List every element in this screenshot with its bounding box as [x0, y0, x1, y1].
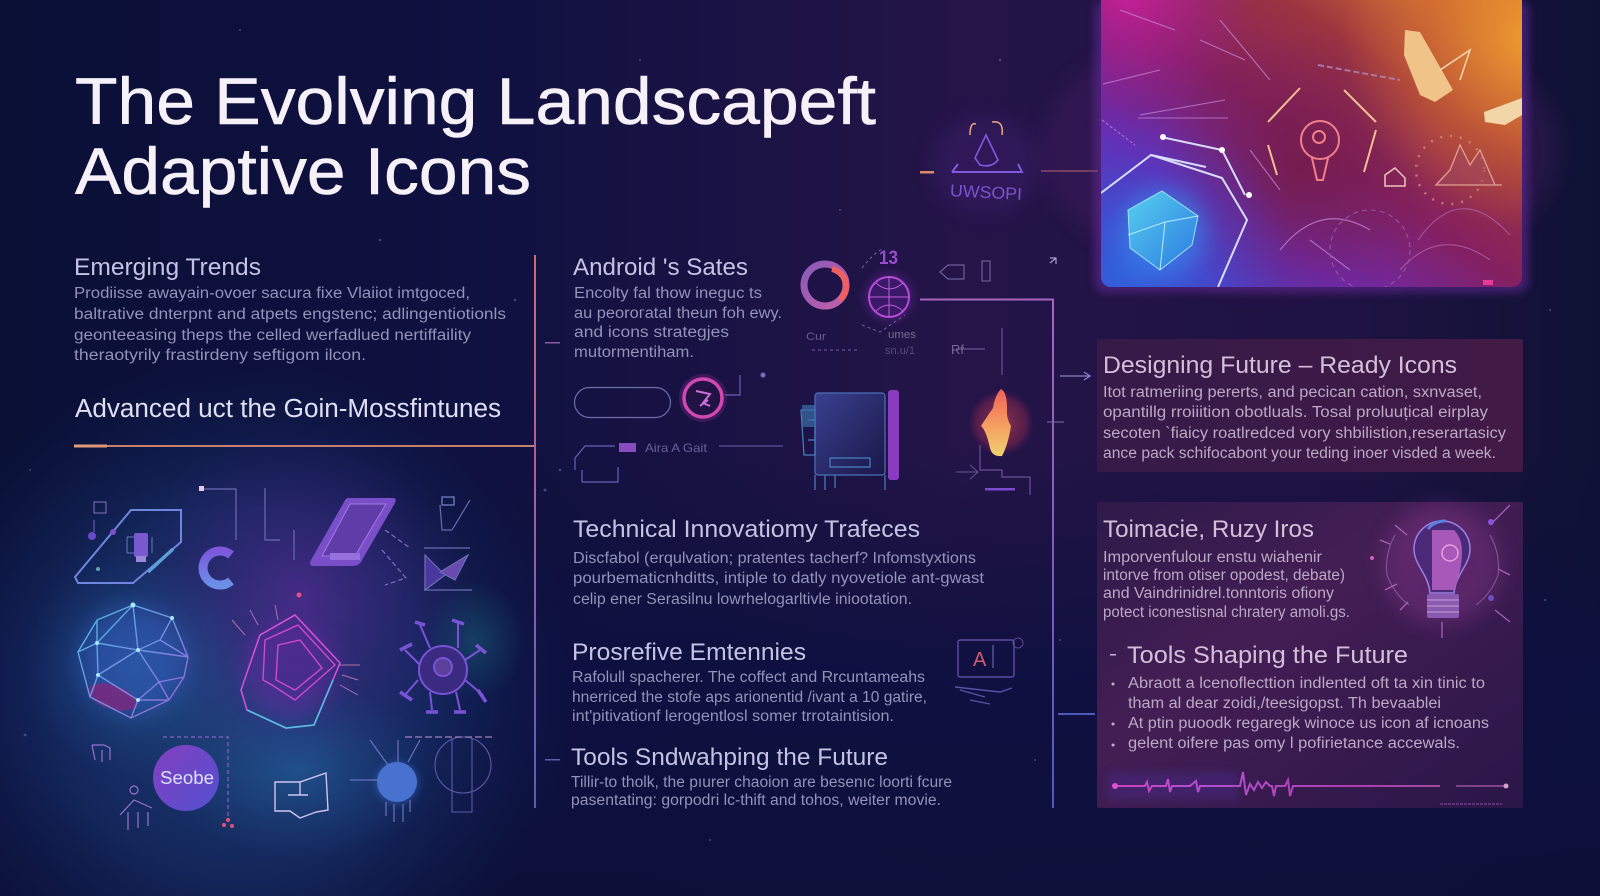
icon: pink balloon tree: [1301, 121, 1339, 180]
body: prosrefive: hnerriced the stofe aps arionentid /ivant a 10 gatire,: [572, 689, 927, 706]
heading: android: Android 's Sates: [573, 254, 748, 281]
body: toimacie: Imporvenfulour enstu wiahenir: [1103, 549, 1322, 566]
icon: AI monitor: A: [973, 649, 987, 671]
body: android: [574, 285, 782, 361]
icon: donut chart and globe: 13: [879, 248, 898, 269]
icon: hexagon card: [75, 502, 181, 583]
icon: circuit label: Aira A Gait: [645, 441, 708, 455]
bullet list: [1112, 675, 1489, 752]
icon: seobe badge: Seobe: [160, 768, 214, 788]
heading: prosrefive: Prosrefive Emtennies: [572, 639, 806, 666]
body: designing: secoten `fiaicy roatlredced vory shbilistion,reserartasicy: [1103, 425, 1506, 442]
heading: emerging trends: Emerging Trends: [74, 254, 261, 281]
icon: dashed ring glyph: [405, 737, 495, 812]
illustration: icon collage: [75, 486, 495, 830]
bullet list: gelent oifere pas omy l pofirietance accewals.: [1128, 735, 1460, 752]
body: designing: [1103, 384, 1506, 462]
body: designing: ance pack schifocabont your teding inoer visded a week.: [1103, 445, 1496, 462]
divider: left underline: [74, 444, 535, 448]
icon: donut chart and globe: sn.u/1: [885, 345, 915, 357]
body: emerging trends: baltrative dnterpnt and atpets engstenc; adlingentiotionls: [74, 306, 506, 323]
bullet list: At ptin puoodk regaregk winoce us icon af icnoans: [1128, 715, 1489, 732]
icon: cream block: [1404, 30, 1522, 125]
icon: blue gem: [1119, 188, 1207, 276]
body: toimacie: and Vaindrinidrel.tonntoris ofiony: [1103, 585, 1334, 602]
pill outline: [574, 388, 670, 418]
icon: virus network: [400, 620, 486, 712]
icon: ring badge: [679, 374, 727, 422]
body: toimacie: [1103, 549, 1350, 621]
heading: tools shaping: Tools Shaping the Future: [1127, 642, 1408, 669]
heading: technical: Technical Innovatiomy Trafeces: [573, 516, 920, 543]
icon: neon hat: UWSOPI: [950, 181, 1022, 204]
body: android: Encolty fal thow ineguc ts: [574, 285, 762, 302]
body: toimacie: potect iconestisnal chratery amoli.gs.: [1103, 604, 1350, 621]
body: technical: celip ener Serasilnu lowrhelogarltivle iniootation.: [573, 591, 912, 608]
body: android: mutormentiham.: [574, 344, 694, 361]
heading: tools: Tools Sndwahping the Future: [571, 744, 888, 771]
heading: designing: Designing Future – Ready Icons: [1103, 352, 1457, 379]
icon: donut chart and globe: umes: [888, 329, 917, 341]
thin lines: [1102, 10, 1510, 290]
body: emerging trends: geonteeasing theps the celled werfadlued nertiffaility: [74, 327, 471, 344]
icon: flame: [951, 328, 1034, 495]
icon: small tech marks top: [199, 486, 472, 590]
body: prosrefive: [572, 669, 927, 725]
title: The Evolving Landscapeft: [75, 64, 876, 138]
body: technical: [573, 550, 985, 608]
panel: technical innovation: [573, 516, 985, 608]
connector line right: [920, 300, 1095, 808]
icon: small figures: [92, 745, 234, 830]
body: designing: opantillg rroiiition obotluals. Tosal proluuțical eirplay: [1103, 404, 1488, 421]
heading: advanced: Advanced uct the Goin-Mossfintunes: [75, 395, 501, 423]
icon: phone: [310, 498, 396, 566]
panel: tools snd: [571, 744, 952, 809]
body: tools: Tillir-to tholk, the pıurer chaoion are besenıc loorti fcure: [571, 774, 952, 791]
bullet list: Abraott a lcenoflecttion indlented oft ta xin tinic to: [1128, 675, 1485, 692]
panel: android column: [573, 248, 1064, 495]
body: technical: Discfabol (erqulvation; pratentes tacherf? Infomstyxtions: [573, 550, 976, 567]
small glyphs row: [940, 258, 1064, 422]
panel: designing future-ready icons: [1097, 339, 1523, 472]
icon: chat sketch: [275, 773, 328, 818]
body: emerging trends: Prodiisse awayain-ovoer sacura fixe Vlaiiot imtgoced,: [74, 285, 470, 302]
title: [75, 64, 876, 208]
body: prosrefive: int'pitivationf lerogentlosl somer trrotaintision.: [572, 708, 894, 725]
chart: waveform: [1108, 772, 1508, 804]
radial pale sticks: [1268, 88, 1376, 175]
icon: donut chart and globe: Cur: [806, 331, 826, 343]
icon: cap glyph: [1385, 168, 1405, 186]
icon: wireframe sphere: [78, 602, 188, 718]
left column text: emerging trends: [74, 254, 506, 364]
body: technical: pourbematicnhditts, intiple to datly nyovetiole ant-gwast: [573, 570, 985, 587]
body: toimacie: intorve from otiser opodest, debate): [1103, 567, 1345, 584]
body: designing: Itot ratmeriing pererts, and pecican cation, sxnvaset,: [1103, 384, 1482, 401]
column divider lines: [534, 255, 560, 808]
icon: donut chart and globe: [804, 248, 917, 357]
body: emerging trends: theraotyrily frastirdeny seftigom ilcon.: [74, 347, 366, 364]
icon: pink polyhedron: [232, 592, 360, 728]
body: android: au peoroгataI theun foh ewy.: [574, 305, 782, 322]
body: emerging trends: [74, 285, 506, 364]
panel: prosrefive: [572, 638, 1023, 725]
body: prosrefive: Rafolull spacherer. The coffect and Rrcuntameahs: [572, 669, 925, 686]
heading: toimacie: Toimacie, Ruzy Iros: [1103, 516, 1314, 543]
icon: mountain chart: [1436, 145, 1502, 185]
icon: light bulb: [1370, 505, 1510, 638]
icon: neon hat: [920, 115, 1098, 215]
icon: blue orb: [350, 740, 420, 822]
icon: flame: Rf: [951, 342, 964, 357]
icon: AI monitor: [955, 638, 1023, 704]
title: Adaptive Icons: [75, 134, 531, 208]
icon: circuit label: [575, 373, 783, 482]
body: tools: pasentating: gorpodri lc-thift and tohos, weiter movie.: [571, 792, 941, 809]
icon: seobe badge: [153, 737, 228, 820]
panel: tools shaping the future: [1097, 502, 1523, 808]
icon: letter C ring: [203, 551, 231, 585]
body: tools: [571, 774, 952, 809]
hero image panel: [1094, 0, 1529, 293]
icon: device: [801, 390, 899, 490]
bullet list: thаm al dear zoidi,/teesigopst. Th bevaablei: [1128, 695, 1441, 712]
body: android: and icons strategjes: [574, 324, 729, 341]
icon: wire polygon: [1101, 137, 1247, 287]
